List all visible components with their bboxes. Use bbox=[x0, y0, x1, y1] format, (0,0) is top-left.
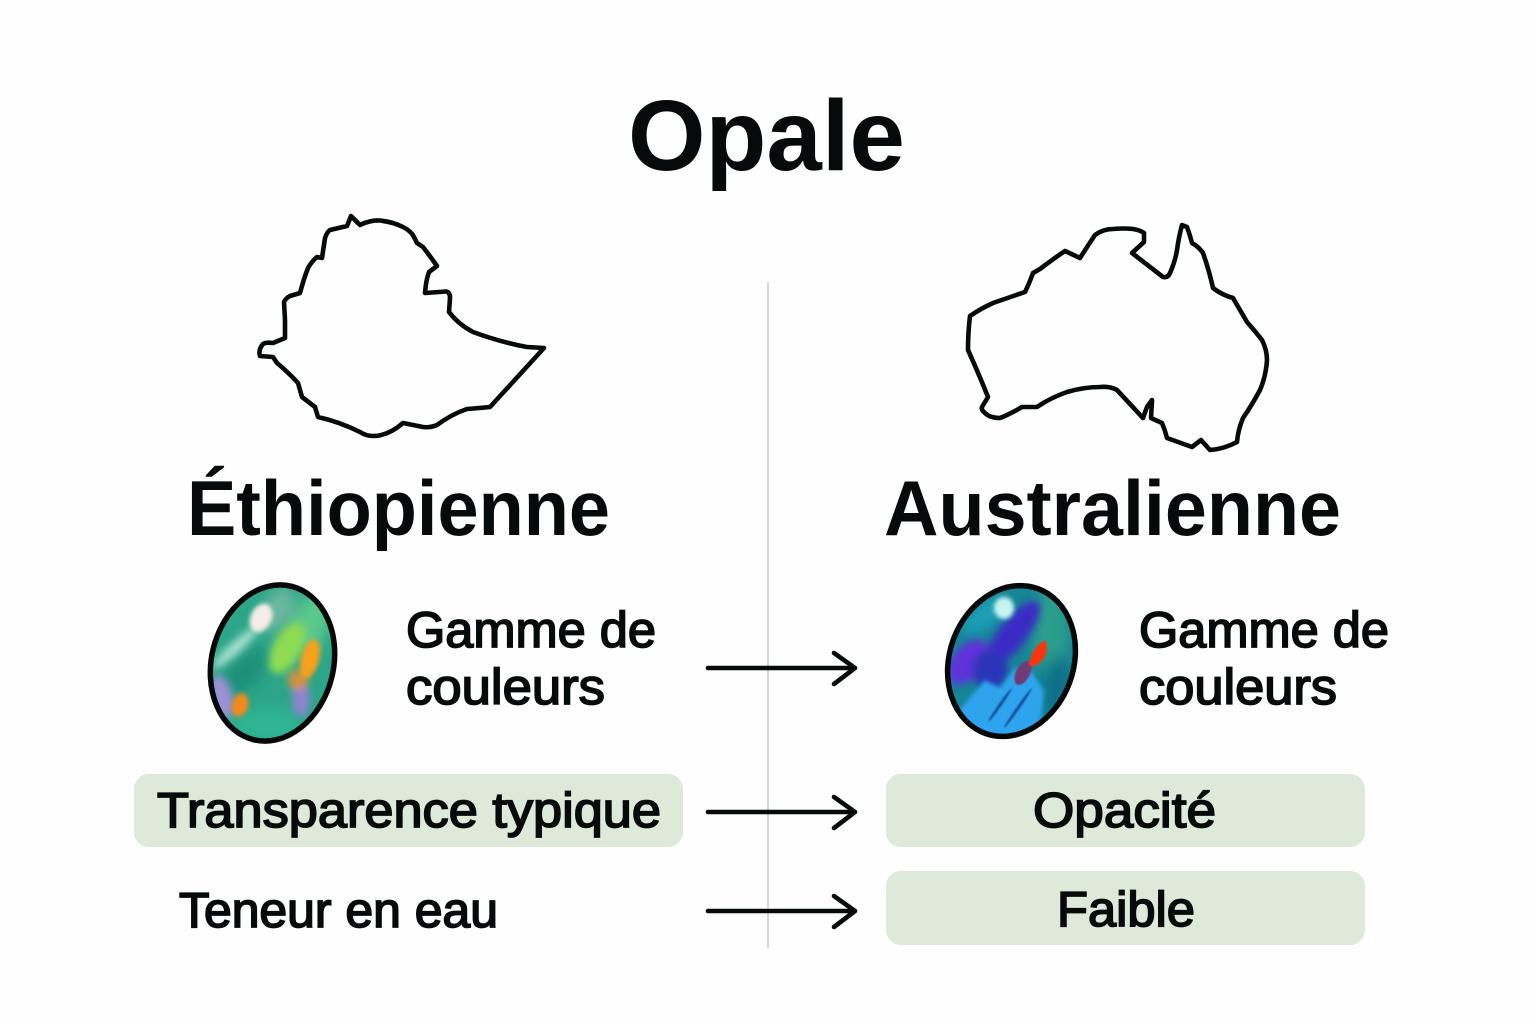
map: Australia outline bbox=[968, 225, 1267, 450]
arrow: water content bbox=[708, 896, 855, 927]
label: Gamme de couleurs (right) bbox=[1139, 602, 1389, 715]
arrow: transparency bbox=[708, 797, 855, 828]
title: Opale bbox=[628, 80, 905, 192]
pill: Opacité: Opacité bbox=[1033, 784, 1216, 838]
pill: Faible: Faible bbox=[1057, 883, 1195, 937]
pill: Opacité bbox=[886, 774, 1365, 847]
label: Gamme de couleurs (left) bbox=[406, 602, 656, 715]
map: Ethiopia outline bbox=[259, 216, 544, 436]
pill: Transparence typique: Transparence typique bbox=[157, 784, 661, 838]
icon: Australian opal bbox=[944, 582, 1078, 740]
heading: Australienne: Australienne bbox=[884, 464, 1341, 552]
pill: Transparence typique bbox=[134, 774, 683, 847]
label: Gamme de couleurs (left): Gamme de bbox=[406, 602, 656, 658]
label: Gamme de couleurs (right): Gamme de bbox=[1139, 602, 1389, 658]
divider bbox=[767, 282, 769, 948]
label: Gamme de couleurs (right): couleurs bbox=[1139, 659, 1337, 715]
icon: Ethiopian opal bbox=[208, 582, 338, 744]
label: Gamme de couleurs (left): couleurs bbox=[406, 659, 605, 715]
heading: Éthiopienne: Éthiopienne bbox=[187, 464, 610, 552]
label: Teneur en eau: Teneur en eau bbox=[179, 884, 498, 938]
arrow: colour range bbox=[708, 653, 855, 684]
pill: Faible bbox=[886, 871, 1365, 945]
